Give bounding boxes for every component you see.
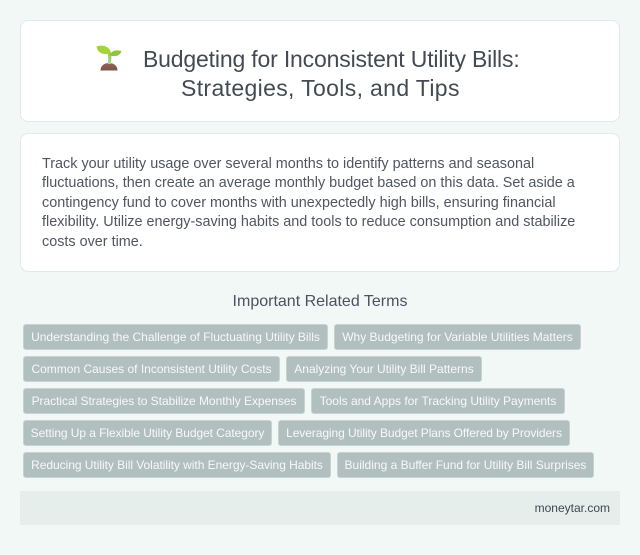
tag (334, 324, 581, 350)
summary text: flexibility. Utilize energy-saving habits and tools to reduce consumption and stabilize (42, 214, 575, 230)
summary text: fluctuations, then create an average monthly budget based on this data. Set aside a (42, 175, 575, 191)
tag (278, 420, 570, 446)
icon: seedling (96, 46, 122, 70)
panel: summary (20, 133, 620, 272)
tag list (23, 324, 594, 478)
tag (23, 420, 272, 446)
tag (23, 356, 280, 382)
tag (311, 388, 565, 414)
heading: related terms: Important Related Terms (233, 292, 407, 310)
tag: Common Causes of Inconsistent Utility Costs (31, 362, 272, 376)
title (143, 46, 520, 101)
tag (23, 388, 305, 414)
tag: Building a Buffer Fund for Utility Bill Surprises (345, 458, 586, 472)
tag: Why Budgeting for Variable Utilities Matters (342, 330, 573, 344)
summary text: contingency fund to cover months with unexpectedly high bills, ensuring financial (42, 195, 556, 211)
footer brand: moneytar.com (535, 501, 610, 515)
tag (23, 452, 331, 478)
tag: Practical Strategies to Stabilize Monthly Expenses (32, 394, 296, 408)
title: Strategies, Tools, and Tips (181, 74, 460, 100)
title: Budgeting for Inconsistent Utility Bills: (143, 46, 520, 72)
tag: Setting Up a Flexible Utility Budget Category (31, 426, 264, 440)
panel: header (20, 20, 620, 122)
summary text (42, 156, 575, 250)
footer (20, 491, 620, 525)
summary text: costs over time. (42, 234, 143, 250)
tag: Analyzing Your Utility Bill Patterns (294, 362, 474, 376)
tag: Tools and Apps for Tracking Utility Payments (320, 394, 556, 408)
tag (286, 356, 482, 382)
tag: Understanding the Challenge of Fluctuating Utility Bills (31, 330, 320, 344)
tag: Reducing Utility Bill Volatility with Energy-Saving Habits (31, 458, 323, 472)
tag (337, 452, 594, 478)
summary text: Track your utility usage over several months to identify patterns and seasonal (42, 156, 534, 172)
tag: Leveraging Utility Budget Plans Offered by Providers (286, 426, 562, 440)
tag (23, 324, 328, 350)
